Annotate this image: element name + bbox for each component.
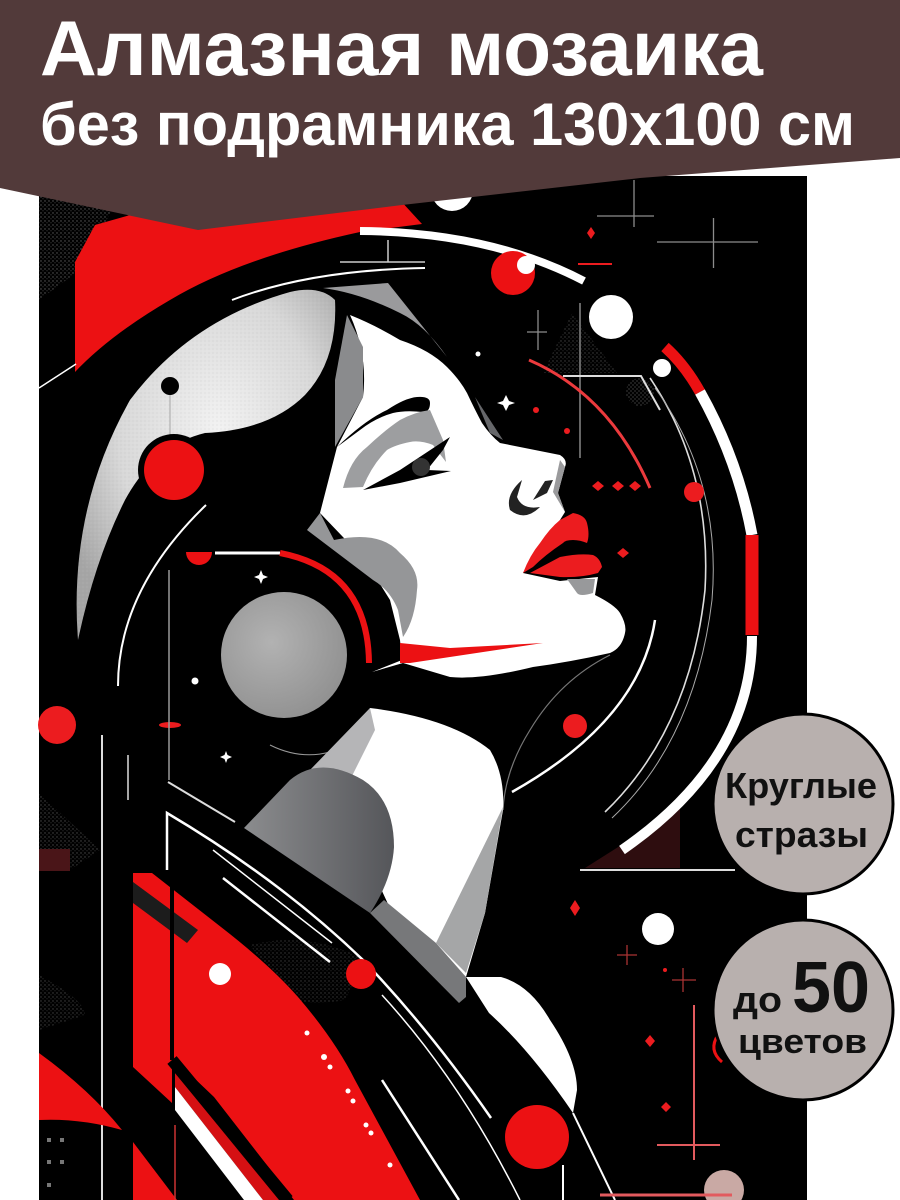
eyebrow xyxy=(337,397,430,447)
badge first line: Круглые xyxy=(725,765,877,806)
nostril xyxy=(533,480,553,500)
speckled texture patches xyxy=(39,195,680,1030)
chin red stroke xyxy=(400,643,543,663)
header banner xyxy=(0,0,900,230)
top thin and thick arcs xyxy=(39,231,584,755)
colours label: цветов xyxy=(738,1023,867,1061)
bottom left red shapes xyxy=(39,1053,177,1200)
headphones xyxy=(186,552,369,718)
title: Алмазная мозаика xyxy=(40,4,764,92)
thin crosses and lines xyxy=(527,180,758,458)
coat white stripe xyxy=(175,1087,263,1200)
mouth underlay xyxy=(524,522,604,581)
number 50: 50 xyxy=(792,948,870,1028)
nose shadow xyxy=(553,460,565,512)
red planet with white dot xyxy=(491,251,535,295)
badge: up to 50 colours xyxy=(713,920,893,1100)
hair grey highlight xyxy=(323,283,447,357)
helmet crescent xyxy=(77,290,335,640)
small red marks xyxy=(38,227,704,1112)
badge: round rhinestones xyxy=(713,714,893,894)
artwork: retro-futuristic woman portrait xyxy=(38,169,807,1200)
coat white lines xyxy=(167,813,615,1200)
big red coat band xyxy=(133,873,420,1200)
coat thin red stripe xyxy=(175,1073,279,1200)
subtitle: без подрамника 130х100 см xyxy=(40,91,855,158)
neck and shoulder xyxy=(244,708,577,1113)
red hat shape xyxy=(75,200,422,372)
white circles xyxy=(431,169,671,377)
red circles on coat xyxy=(346,959,569,1169)
right side arcs xyxy=(503,347,752,870)
iris xyxy=(412,458,430,476)
face shape xyxy=(320,315,625,678)
lip shadow xyxy=(567,579,595,595)
hair grey panel xyxy=(335,315,363,447)
small grey squares xyxy=(47,1138,64,1187)
vertical lines left xyxy=(102,570,235,1200)
temple grey xyxy=(475,397,503,440)
nostril crescent xyxy=(509,480,540,515)
badge second line: стразы xyxy=(735,814,868,855)
stars xyxy=(192,395,515,763)
upper lip xyxy=(523,513,588,573)
lower right decorations xyxy=(600,913,744,1200)
eyeshadow xyxy=(343,410,446,488)
eye with lashes xyxy=(357,437,451,497)
lower lip xyxy=(530,554,602,577)
cheek shadow xyxy=(307,513,417,637)
prefix: до xyxy=(733,979,782,1020)
coat dark bar xyxy=(133,882,198,943)
face xyxy=(307,283,625,678)
coat dots xyxy=(209,963,392,1168)
antenna with red circle xyxy=(138,377,210,506)
